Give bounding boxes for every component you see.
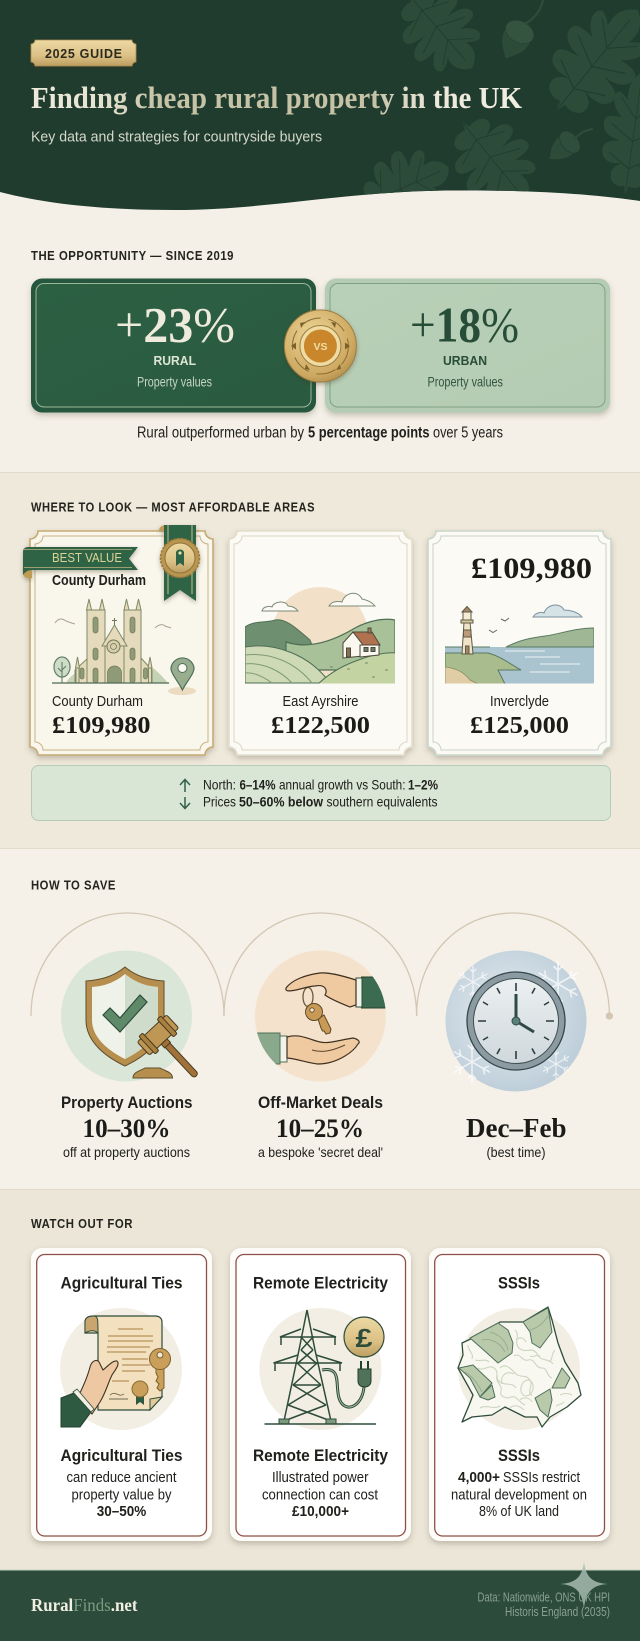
badge: 2025 guide: 2025 GUIDE (45, 47, 122, 61)
price gap line (203, 794, 438, 810)
description: SSSIs restrict (503, 1470, 580, 1486)
oak leaf and acorn pattern (364, 0, 640, 199)
icon: shield and gavel (61, 950, 211, 1090)
price gap line: southern equivalents (326, 794, 438, 810)
heading: how to save: HOW TO SAVE (31, 878, 116, 892)
title: Remote Electricity (253, 1274, 388, 1292)
growth line: 6–14% (240, 776, 276, 792)
icon: winter clock (446, 950, 586, 1092)
icon: pylon and plug (259, 1308, 384, 1430)
description (262, 1470, 378, 1520)
comparison caption: 5 percentage points (308, 424, 430, 442)
sources (478, 1590, 610, 1619)
panel: agricultural ties (31, 1248, 212, 1541)
text: property auctions (61, 1093, 192, 1160)
growth line: 1–2% (408, 776, 438, 792)
comparison caption: over 5 years (433, 424, 503, 442)
text: best time: Dec–Feb (466, 1113, 566, 1143)
description (66, 1470, 176, 1520)
illustration: rolling hills and cottage (245, 587, 396, 684)
text: off-market deals (258, 1093, 383, 1160)
panel: rural: Property values (137, 374, 212, 390)
icon: medal ribbon (159, 525, 200, 601)
text: best time: (best time) (486, 1144, 546, 1160)
header banner (0, 0, 640, 210)
panel: urban (325, 278, 610, 412)
text: property auctions: 10–30% (82, 1114, 170, 1143)
description: 30–50% (97, 1504, 146, 1520)
panel: Inverclyde (428, 531, 611, 755)
heading: the opportunity: THE OPPORTUNITY — SINCE 2019 (31, 248, 234, 263)
panel: rural: +23% (115, 296, 235, 352)
cottage (343, 628, 380, 658)
panel: SSSIs (429, 1248, 610, 1541)
gavel (133, 1013, 211, 1090)
footer (0, 1562, 640, 1641)
growth line: annual growth vs South: (279, 776, 406, 792)
icon: up arrow (180, 780, 190, 792)
title: Agricultural Ties (60, 1274, 182, 1292)
lower title: Remote Electricity (253, 1446, 388, 1465)
sources: Historis England (2035) (505, 1605, 610, 1619)
heading: watch out for: WATCH OUT FOR (31, 1216, 133, 1231)
comparison caption (137, 424, 503, 442)
description: property value by (72, 1487, 172, 1503)
badge: 2025 guide (31, 40, 136, 66)
connecting arcs (31, 913, 612, 1019)
top price: £109,980 (471, 552, 592, 585)
best value location label: County Durham (52, 572, 146, 589)
price gap line: 50–60% below (239, 794, 323, 810)
price: £125,000 (470, 713, 569, 739)
icon: deed, hand and key (60, 1308, 182, 1430)
comparison caption: Rural outperformed urban by (137, 424, 304, 442)
text: property auctions: off at property auctions (63, 1144, 190, 1160)
description: can reduce ancient (66, 1470, 176, 1486)
icon: down arrow (180, 797, 190, 808)
lower title: Agricultural Ties (60, 1446, 182, 1465)
description: 4,000+ (458, 1470, 500, 1486)
text: off-market deals: Off-Market Deals (258, 1093, 383, 1112)
icon: map pin (168, 658, 196, 695)
location name: County Durham (52, 694, 143, 710)
vs medallion: VS (314, 341, 328, 353)
icon: key handover (255, 950, 390, 1082)
badge: best value ribbon (23, 547, 138, 578)
subtitle: Key data and strategies for countryside buyers (31, 128, 322, 146)
panel: East Ayrshire (229, 531, 412, 755)
illustration: lighthouse and coast (445, 605, 594, 684)
description: 8% of UK land (479, 1504, 559, 1520)
text: off-market deals: 10–25% (276, 1114, 364, 1143)
price: £109,980 (52, 713, 150, 739)
price gap line: Prices (203, 794, 236, 810)
panel: rural: RURAL (154, 353, 196, 368)
logo: RuralFinds.net (31, 1595, 138, 1615)
badge: best value ribbon: BEST VALUE (52, 550, 122, 565)
location name: East Ayrshire (282, 694, 358, 710)
icon: cathedral (52, 599, 171, 683)
heading: where to look: WHERE TO LOOK — MOST AFFORDABLE AREAS (31, 500, 315, 514)
text: best time (466, 1113, 566, 1160)
panel: remote electricity (230, 1248, 411, 1541)
icon: protected land map (458, 1307, 581, 1430)
title: Finding cheap rural property in the UK (31, 80, 522, 115)
price: £122,500 (271, 713, 370, 739)
description: £10,000+ (292, 1504, 349, 1520)
panel: urban: URBAN (443, 353, 487, 368)
location name: Inverclyde (490, 694, 549, 710)
description: Illustrated power (272, 1470, 369, 1486)
pound coin: £ (356, 1323, 373, 1353)
panel: urban: +18% (410, 296, 519, 352)
icon: sparkle (560, 1562, 608, 1608)
panel: County Durham (30, 531, 213, 755)
text: property auctions: Property Auctions (61, 1093, 192, 1112)
vs medallion (284, 310, 356, 382)
description: natural development on (451, 1487, 587, 1503)
growth line: North: (203, 776, 236, 792)
text: off-market deals: a bespoke 'secret deal' (258, 1144, 383, 1160)
callout: north vs south (32, 766, 610, 820)
panel: rural (31, 278, 316, 412)
lower title: SSSIs (498, 1446, 540, 1465)
panel: urban: Property values (428, 374, 503, 390)
growth line (203, 776, 438, 792)
title: SSSIs (498, 1274, 540, 1292)
description (451, 1470, 587, 1520)
description: connection can cost (262, 1487, 378, 1503)
